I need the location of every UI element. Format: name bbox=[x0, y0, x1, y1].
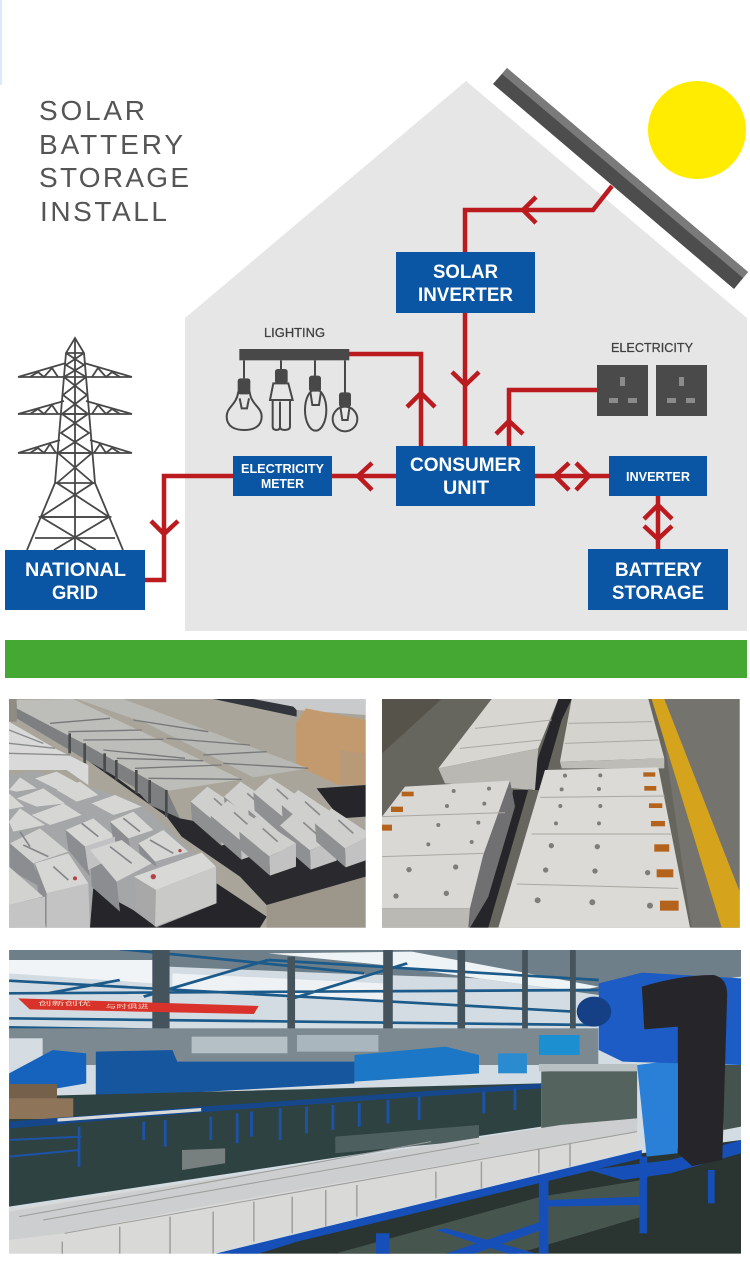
box: inverter bbox=[609, 456, 707, 496]
icon: transmission tower bbox=[18, 338, 132, 550]
label: lighting: LIGHTING bbox=[264, 325, 325, 340]
box: national grid: NATIONAL bbox=[25, 560, 126, 581]
lower left block bbox=[382, 781, 510, 908]
box: consumer unit bbox=[396, 446, 535, 506]
lower right block bbox=[498, 767, 690, 928]
box: consumer unit: UNIT bbox=[443, 478, 489, 499]
left battery sides bbox=[10, 822, 157, 928]
photo: factory conveyor line: 创新创优 bbox=[38, 1000, 91, 1007]
left cluster mass bbox=[9, 772, 217, 928]
title: INSTALL bbox=[40, 196, 167, 227]
pallets bbox=[17, 703, 366, 905]
title bbox=[39, 95, 189, 227]
box: solar inverter bbox=[396, 252, 535, 313]
box: electricity meter: ELECTRICITY bbox=[241, 461, 324, 476]
left battery tops bbox=[9, 772, 188, 862]
wiring: red connectors bbox=[145, 186, 672, 580]
bin bbox=[317, 785, 366, 818]
label: electricity: ELECTRICITY bbox=[611, 340, 693, 355]
pallet stack bbox=[9, 1084, 57, 1099]
box: battery storage: STORAGE bbox=[612, 583, 704, 604]
house silhouette bbox=[185, 81, 747, 631]
right battery rows bbox=[190, 786, 240, 846]
black duct bbox=[642, 975, 727, 1166]
back wall bbox=[9, 1028, 598, 1065]
dark floor lower right bbox=[230, 1140, 741, 1254]
icon: socket 1 bbox=[597, 365, 648, 416]
box: national grid: GRID bbox=[52, 583, 98, 604]
icon: light fitting with bulbs bbox=[227, 349, 357, 431]
title: SOLAR bbox=[39, 95, 145, 126]
box: solar inverter: INVERTER bbox=[418, 285, 513, 306]
icon: sun bbox=[648, 81, 746, 179]
yellow line bbox=[652, 699, 740, 928]
banner bbox=[18, 998, 259, 1014]
box: battery storage: BATTERY bbox=[615, 560, 702, 581]
box: consumer unit: CONSUMER bbox=[410, 455, 521, 476]
batteries on conveyor bbox=[9, 1118, 637, 1254]
blue conveyor frame bbox=[216, 1150, 642, 1254]
floor bbox=[9, 1083, 541, 1207]
box: battery storage bbox=[588, 549, 728, 610]
box: electricity meter: METER bbox=[261, 476, 305, 491]
photo: batteries on pallets bbox=[9, 699, 372, 928]
photo: white batteries and yellow floor line bbox=[382, 699, 740, 928]
title: STORAGE bbox=[39, 162, 189, 193]
box: inverter: INVERTER bbox=[626, 469, 691, 484]
roof trusses bbox=[9, 949, 741, 995]
cardboard box bbox=[296, 708, 366, 785]
front batteries bbox=[9, 818, 216, 928]
upper right block bbox=[560, 699, 664, 762]
blue machines bbox=[9, 1050, 86, 1097]
title: BATTERY bbox=[39, 129, 183, 160]
photo: factory conveyor line bbox=[9, 949, 741, 1254]
icon: socket 2 bbox=[656, 365, 707, 416]
box: national grid bbox=[5, 550, 145, 610]
blue oven tower bbox=[637, 1060, 678, 1157]
ground bar bbox=[5, 640, 747, 678]
box: electricity meter bbox=[233, 456, 332, 496]
icon: solar panel bbox=[493, 68, 748, 289]
roller conveyor bbox=[9, 1083, 541, 1128]
upper left block bbox=[438, 699, 558, 768]
back rows bbox=[77, 699, 308, 777]
photo: factory conveyor line: 与时俱进 bbox=[105, 1003, 148, 1010]
box: solar inverter: SOLAR bbox=[433, 262, 498, 283]
glass tunnel bbox=[541, 1065, 637, 1128]
